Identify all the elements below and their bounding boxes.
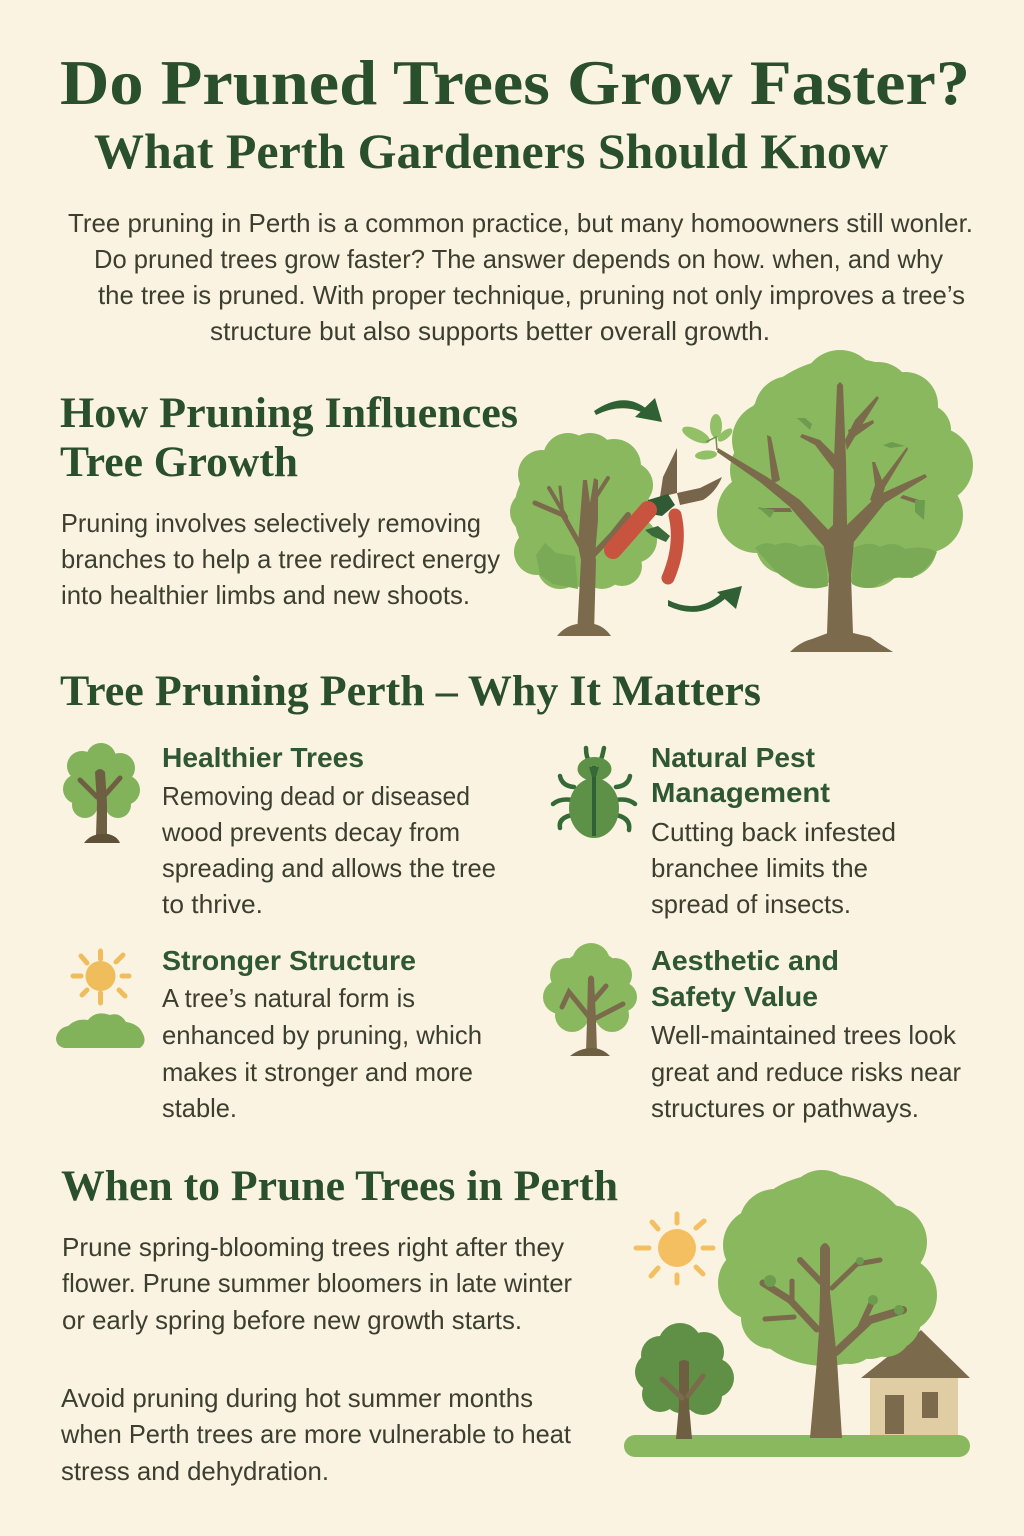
summer warning text: stress and dehydration. <box>61 1456 329 1486</box>
sun <box>636 1214 713 1283</box>
pruning explanation text: branches to help a tree redirect energy <box>61 544 500 574</box>
illustration: garden scene <box>624 1170 970 1457</box>
timing advice text: Prune spring-blooming trees right after they <box>62 1232 564 1262</box>
benefit: aesthetic and safety value: Well-maintained trees look <box>651 1020 957 1050</box>
leaf sprig <box>680 414 734 460</box>
timing advice text: or early spring before new growth starts. <box>62 1305 522 1335</box>
trunk and branches <box>717 382 927 652</box>
benefit: natural pest management: branchee limits the <box>651 853 868 883</box>
icon: rounded tree <box>543 943 637 1056</box>
benefit: stronger structure <box>56 945 482 1123</box>
intro text block <box>68 208 973 346</box>
heading: why it matters: Tree Pruning Perth – Why It Matters <box>60 668 761 715</box>
heading: how pruning influences tree growth <box>60 390 518 486</box>
summer warning text: when Perth trees are more vulnerable to heat <box>60 1419 572 1449</box>
icon: tree <box>63 743 140 843</box>
intro text block: Tree pruning in Perth is a common practice, but many homoowners still wonler. <box>68 208 973 238</box>
benefit: aesthetic and safety value: Safety Value <box>651 981 818 1012</box>
subtitle: What Perth Gardeners Should Know <box>94 123 888 179</box>
title: Do Pruned Trees Grow Faster? <box>60 47 970 118</box>
house <box>861 1330 970 1435</box>
benefit: stronger structure: enhanced by pruning, which <box>162 1020 482 1050</box>
intro text block: structure but also supports better overall growth. <box>210 316 770 346</box>
benefit: natural pest management: spread of insects. <box>651 889 851 919</box>
intro text block: the tree is pruned. With proper technique, pruning not only improves a tree’s <box>98 280 965 310</box>
benefit: stronger structure: Stronger Structure <box>162 945 416 976</box>
summer warning text <box>60 1383 572 1486</box>
benefit: stronger structure: makes it stronger and more <box>162 1057 473 1087</box>
icon: beetle <box>553 748 635 838</box>
benefit: natural pest management: Management <box>651 777 830 808</box>
benefit: aesthetic and safety value: structures or pathways. <box>651 1093 919 1123</box>
benefit: aesthetic and safety value: great and reduce risks near <box>651 1057 961 1087</box>
illustration: large tree after pruning <box>680 350 973 652</box>
benefit: natural pest management: Cutting back infested <box>651 817 896 847</box>
benefit: healthier trees: to thrive. <box>162 889 263 919</box>
benefit: healthier trees: spreading and allows the tree <box>162 853 496 883</box>
summer warning text: Avoid pruning during hot summer months <box>61 1383 533 1413</box>
arrow: bottom curved <box>668 586 742 612</box>
benefit: stronger structure: stable. <box>162 1093 237 1123</box>
benefit: aesthetic and safety value: Aesthetic and <box>651 945 839 976</box>
benefit: healthier trees: wood prevents decay from <box>161 817 460 847</box>
ground <box>624 1435 970 1457</box>
benefit: natural pest management <box>553 742 896 919</box>
benefit: healthier trees <box>63 742 496 919</box>
benefit: healthier trees: Healthier Trees <box>162 742 364 773</box>
benefit: stronger structure: A tree’s natural form is <box>162 983 415 1013</box>
illustration: small tree before pruning <box>510 433 657 636</box>
pruning shears <box>613 448 722 578</box>
timing advice text <box>62 1232 572 1335</box>
timing advice text: flower. Prune summer bloomers in late winter <box>62 1268 572 1298</box>
benefit: aesthetic and safety value <box>543 943 961 1123</box>
pruning explanation text <box>61 508 500 610</box>
pruning explanation text: Pruning involves selectively removing <box>61 508 481 538</box>
large tree by house <box>718 1170 937 1438</box>
icon: sun over bush <box>56 951 145 1048</box>
pruning explanation text: into healthier limbs and new shoots. <box>61 580 470 610</box>
arrow: top curved <box>594 398 662 422</box>
intro text block: Do pruned trees grow faster? The answer depends on how. when, and why <box>94 244 943 274</box>
benefit: natural pest management: Natural Pest <box>651 742 815 773</box>
heading: when to prune: When to Prune Trees in Perth <box>61 1163 618 1210</box>
heading: how pruning influences tree growth: Tree Growth <box>60 439 298 486</box>
heading: how pruning influences tree growth: How Pruning Influences <box>60 390 518 437</box>
benefit: healthier trees: Removing dead or diseased <box>162 781 470 811</box>
small dark tree <box>635 1323 734 1439</box>
